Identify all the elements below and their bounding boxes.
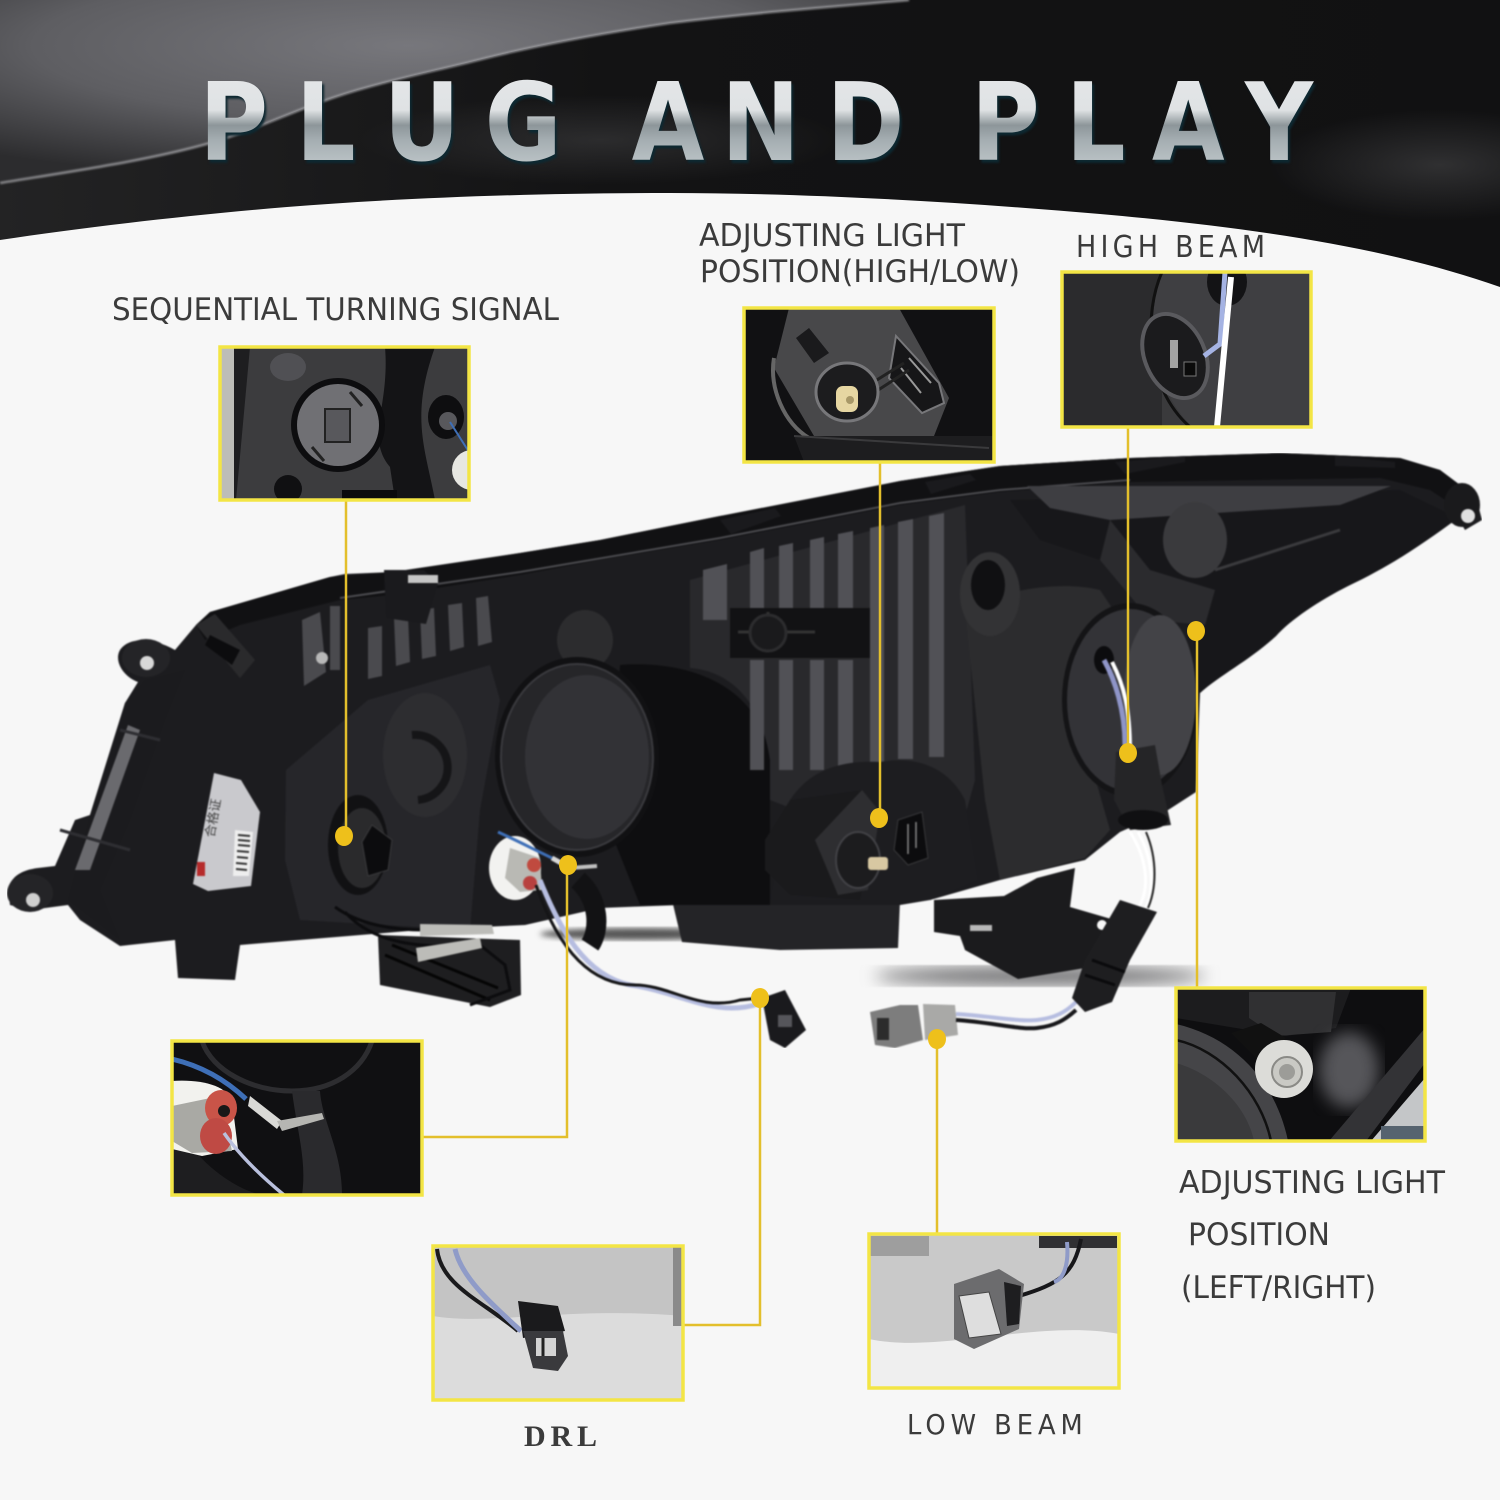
wing inner blob bbox=[1163, 502, 1227, 578]
small stud bbox=[316, 652, 328, 664]
wire loop bbox=[1130, 832, 1151, 908]
label: adjusting light position left/right: (LEFT/RIGHT) bbox=[1181, 1270, 1376, 1306]
right lug screw bbox=[1444, 483, 1480, 527]
motor assembly bbox=[765, 790, 928, 900]
label: adjusting light position high/low: POSITION(HIGH/LOW) bbox=[700, 254, 1020, 290]
lug left bottom bbox=[7, 874, 53, 912]
inset: DRL connector bbox=[433, 1246, 683, 1400]
label: high beam: HIGH BEAM bbox=[1076, 230, 1265, 264]
left body lighter bbox=[285, 665, 500, 930]
low beam wires bbox=[956, 1002, 1076, 1028]
right wires bbox=[1104, 660, 1130, 750]
leader lines and dots bbox=[335, 427, 1205, 1325]
low beam connector bbox=[870, 1004, 958, 1048]
DRL connector bbox=[762, 990, 806, 1048]
top left bracket bbox=[196, 614, 255, 678]
inset: adjusting high/low bbox=[744, 308, 994, 462]
leader: sequential turning signal bbox=[335, 500, 353, 846]
housing silhouette bbox=[8, 453, 1482, 980]
top rim band bbox=[196, 453, 1476, 640]
high beam inline connector bbox=[1072, 900, 1157, 1012]
harness black wire bbox=[335, 907, 510, 1005]
wing recess bbox=[1010, 490, 1458, 693]
label: adjusting light position high/low: ADJUSTING LIGHT bbox=[699, 218, 966, 254]
big left cap bbox=[495, 657, 659, 857]
headlamp assembly bbox=[7, 453, 1482, 1048]
label: low beam: LOW BEAM bbox=[907, 1409, 1083, 1441]
label: adjusting light position left/right: POSITION bbox=[1188, 1217, 1330, 1253]
inset: low beam connector bbox=[869, 1234, 1119, 1388]
label: sequential turning signal: SEQUENTIAL TURNING SIGNAL bbox=[112, 292, 560, 328]
inset: socket and terminal bbox=[172, 1041, 422, 1195]
label: adjusting light position high/low bbox=[699, 218, 1020, 290]
ribs centre bbox=[690, 505, 975, 870]
lower right bracket bbox=[934, 868, 1118, 979]
lug left top bbox=[122, 639, 170, 677]
right cap bbox=[1062, 603, 1198, 797]
product label bbox=[193, 773, 260, 891]
leader: DRL bbox=[683, 988, 769, 1325]
top tabs bbox=[384, 456, 1395, 624]
blue wire and terminal bbox=[498, 832, 597, 868]
ribs left bbox=[302, 596, 492, 686]
socket bbox=[328, 795, 392, 895]
label: DRL: DRL bbox=[524, 1420, 597, 1453]
lower block bbox=[672, 900, 900, 950]
header: dark curved banner bbox=[0, 0, 1500, 287]
leader: adjusting left/right bbox=[1187, 621, 1205, 988]
label: adjusting light position left/right bbox=[1179, 1165, 1446, 1306]
grommet left bbox=[383, 693, 467, 817]
inset: sequential turning signal bbox=[220, 347, 492, 503]
recess behind caps bbox=[610, 664, 770, 905]
floor shadows bbox=[540, 928, 1205, 985]
curved loom bbox=[578, 880, 596, 945]
right grommet bbox=[960, 552, 1020, 636]
leader: high beam bbox=[1119, 427, 1137, 763]
inset: adjusting left/right bbox=[1176, 988, 1425, 1141]
DRL wires bbox=[536, 880, 760, 1008]
bulb socket left bbox=[489, 836, 542, 900]
right bulge bbox=[965, 586, 1120, 880]
left ribbed flange bbox=[68, 670, 185, 940]
blade terminals bbox=[416, 924, 494, 962]
right connector bbox=[1114, 745, 1171, 830]
title: PLUGANDPLAY bbox=[199, 60, 1315, 186]
wing bar bbox=[1027, 486, 1391, 520]
leader: low beam bbox=[928, 1029, 946, 1234]
small cap top left bbox=[557, 610, 613, 670]
bottom connector block bbox=[378, 935, 521, 1007]
leader: adjusting high/low bbox=[870, 462, 888, 828]
inset: high beam bbox=[1062, 258, 1311, 427]
lower centre bulge bbox=[770, 760, 978, 900]
label: adjusting light position left/right: ADJUSTING LIGHT bbox=[1179, 1165, 1446, 1201]
leader: socket inset bbox=[422, 855, 577, 1137]
product label: 合格证 bbox=[202, 797, 224, 839]
